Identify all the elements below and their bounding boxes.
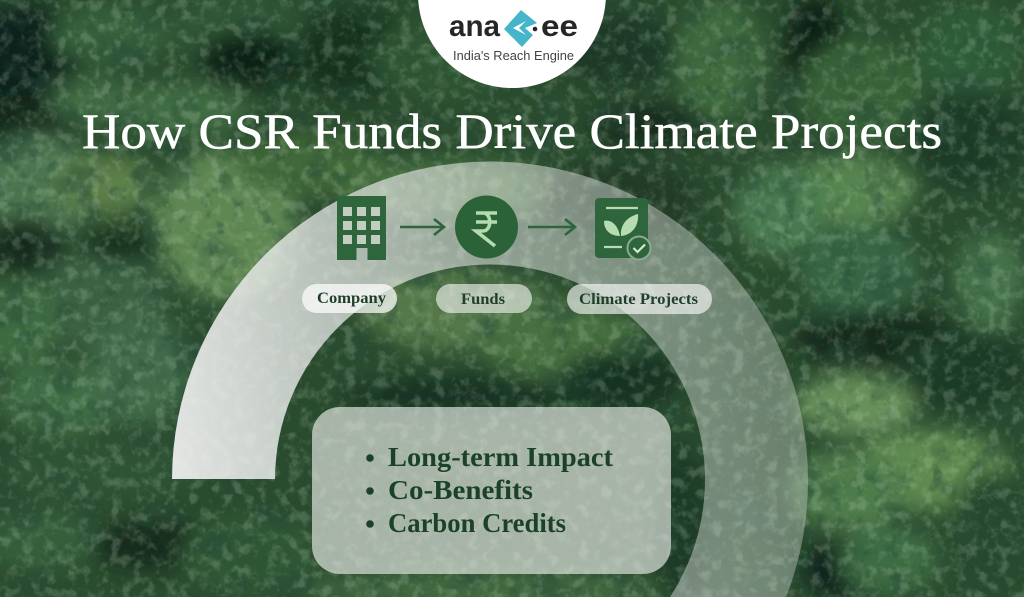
title: How CSR Funds Drive Climate Projects: [82, 103, 942, 159]
label: funds: Funds: [461, 291, 505, 308]
icon: rupee funds: [455, 196, 518, 258]
logo wordmark: [449, 10, 578, 47]
arrow: company to funds: [400, 219, 444, 235]
benefit: long-term impact: Long-term Impact: [388, 442, 613, 472]
label: company: [302, 284, 397, 313]
icon: company building: [337, 196, 386, 260]
panel: benefits list: [312, 407, 671, 574]
label: company: Company: [317, 290, 386, 307]
logo tagline: India's Reach Engine: [453, 49, 574, 63]
logo wordmark: ana: [449, 10, 500, 43]
label: climate projects: Climate Projects: [579, 291, 698, 308]
label: climate projects: [567, 284, 712, 314]
arrow: funds to climate projects: [528, 219, 575, 235]
semi-transparent arch: [172, 161, 808, 597]
benefit: carbon credits: Carbon Credits: [388, 508, 566, 538]
logo wordmark: ee: [541, 10, 578, 43]
icon: climate project document: [595, 198, 650, 260]
label: funds: [436, 284, 532, 313]
benefit: co-benefits: Co-Benefits: [388, 475, 533, 505]
logo badge: [418, 0, 606, 88]
